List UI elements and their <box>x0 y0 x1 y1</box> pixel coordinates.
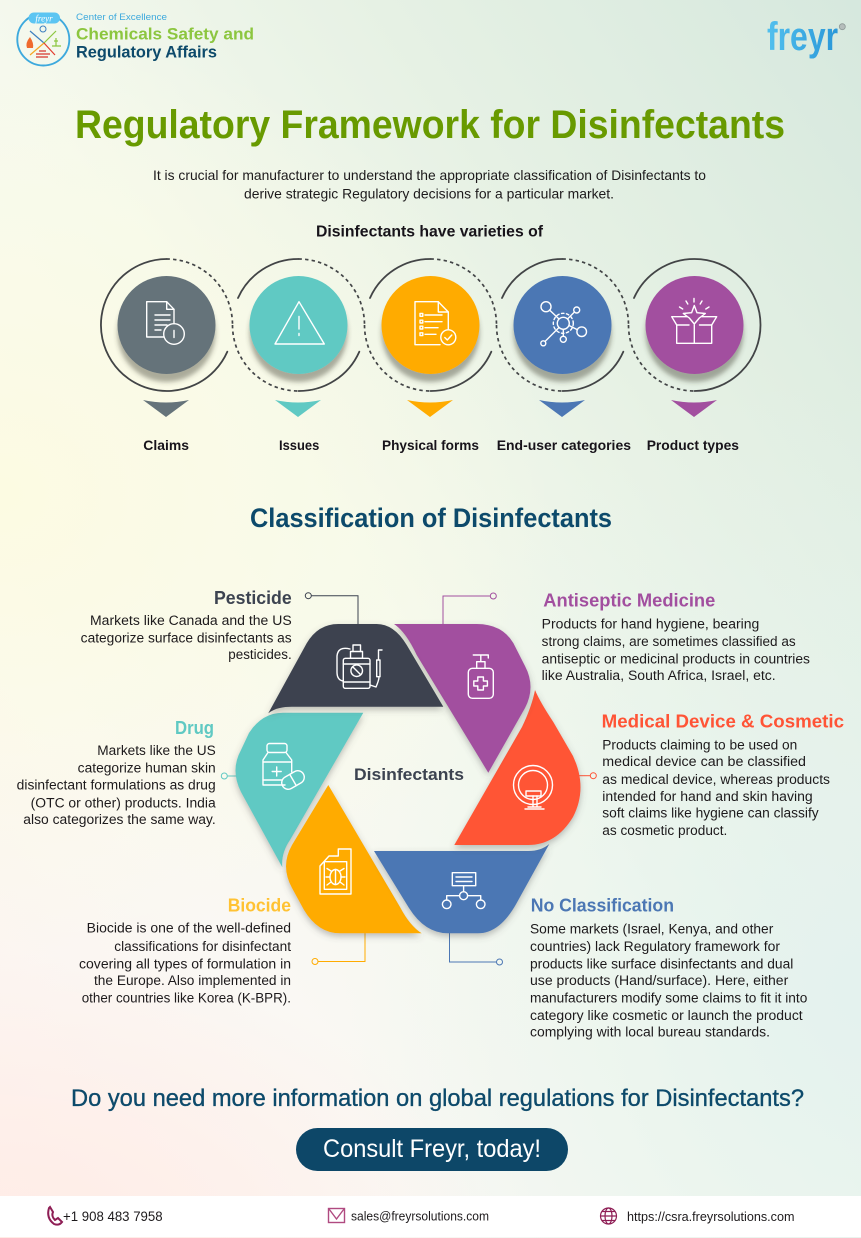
icon: scanner <box>514 766 552 809</box>
text: Antiseptic Medicine: Antiseptic Medicine <box>543 591 715 611</box>
call to action question: Do you need more information on global regulations for Disinfectants? <box>71 1085 804 1112</box>
variety: End-user categories <box>496 259 631 453</box>
connector: pesticide <box>305 593 358 626</box>
text: Antiseptic Medicine: like Australia, South Africa, Israel, etc. <box>542 668 776 683</box>
variety: Physical forms <box>364 259 496 453</box>
diagram: classification hexagon <box>221 593 596 965</box>
button: consult: Consult Freyr, today! <box>323 1135 541 1163</box>
icon: medicine bottle and pill <box>263 744 307 792</box>
segment: medical device <box>454 690 580 845</box>
text: Medical Device & Cosmetic: intended for hand and skin having <box>602 789 813 804</box>
text: Antiseptic Medicine <box>542 591 810 683</box>
logo: Chemicals Safety and Regulatory Affairs: freyr <box>35 14 53 24</box>
text: Medical Device & Cosmetic <box>602 712 844 838</box>
subheading: varieties: Disinfectants have varieties of <box>316 224 544 240</box>
icon: envelope <box>328 1208 344 1222</box>
heading: classification: Classification of Disinfectants <box>250 503 612 533</box>
icon: open box with star <box>672 298 717 343</box>
text: Drug: categorize human skin <box>78 760 216 775</box>
connector: no classification <box>450 932 502 965</box>
text: No Classification: products like surface disinfectants and dual <box>530 956 793 971</box>
connector: biocide <box>312 932 365 964</box>
logo: Chemicals Safety and Regulatory Affairs: Regulatory Affairs <box>76 42 217 62</box>
intro text <box>153 167 706 202</box>
text: Drug: Drug <box>175 718 214 738</box>
icon: document with alert <box>147 302 184 344</box>
text: No Classification: countries) lack Regulatory framework for <box>530 939 781 954</box>
icon: globe <box>600 1208 616 1224</box>
icon: sprayer <box>337 645 382 688</box>
icon: checklist document <box>415 302 456 345</box>
text: No Classification: Some markets (Israel, Kenya, and other <box>530 921 774 936</box>
segment: no classification <box>374 844 549 933</box>
intro text: derive strategic Regulatory decisions for a particular market. <box>244 186 614 202</box>
logo: Chemicals Safety and Regulatory Affairs <box>17 12 254 66</box>
text: Drug: Markets like the US <box>97 743 216 758</box>
text: No Classification: manufacturers modify some claims to fit it into <box>530 990 807 1005</box>
text: Pesticide: categorize surface disinfectants as <box>81 630 292 645</box>
intro text: It is crucial for manufacturer to understand the appropriate classification of Disinfectants to <box>153 167 706 183</box>
title: Regulatory Framework for Disinfectants <box>75 103 785 147</box>
contact: website: https://csra.freyrsolutions.com <box>627 1209 794 1224</box>
variety: Product types: Product types <box>647 437 739 453</box>
variety: Claims: Claims <box>143 437 189 453</box>
variety: Physical forms: Physical forms <box>382 437 479 453</box>
icon: phone <box>48 1207 62 1225</box>
text: Pesticide: Markets like Canada and the US <box>90 613 292 628</box>
segment: drug <box>236 713 363 867</box>
text: Medical Device & Cosmetic: medical device can be classified <box>602 754 806 769</box>
footer <box>0 1196 861 1237</box>
connector: drug <box>221 773 238 779</box>
text: Biocide: Biocide is one of the well-defined <box>87 921 291 936</box>
text: No Classification: No Classification <box>531 896 674 916</box>
variety: Product types <box>628 259 761 453</box>
contact: email: sales@freyrsolutions.com <box>351 1208 489 1224</box>
variety: Claims <box>101 259 233 453</box>
text: Drug: also categorizes the same way. <box>23 812 216 827</box>
connector: medical device <box>579 773 596 779</box>
text: No Classification <box>530 896 807 1040</box>
icon: network nodes <box>541 302 586 346</box>
text: Drug: disinfectant formulations as drug <box>17 778 216 793</box>
text: No Classification: category like cosmetic or launch the product <box>530 1008 803 1023</box>
text: No Classification: complying with local bureau standards. <box>530 1025 770 1040</box>
icon: sanitizer bottle <box>468 655 493 698</box>
text: Medical Device & Cosmetic: as medical device, whereas products <box>602 772 830 787</box>
text: Biocide: the Europe. Also implemented in <box>94 973 291 988</box>
text: Biocide <box>79 896 291 1006</box>
text: Medical Device & Cosmetic: soft claims like hygiene can classify <box>602 806 819 821</box>
text: Biocide: covering all types of formulation in <box>79 956 291 971</box>
variety: End-user categories: End-user categories <box>497 437 631 453</box>
icon: jerrycan with bug <box>320 849 351 894</box>
segment: antiseptic medicine <box>394 624 530 773</box>
button: consult <box>296 1128 568 1171</box>
variety: Issues: Issues <box>279 437 319 453</box>
text: Pesticide: pesticides. <box>228 647 292 662</box>
segment: pesticide <box>268 624 443 713</box>
text: Antiseptic Medicine: strong claims, are sometimes classified as <box>542 634 796 649</box>
contact: phone: +1 908 483 7958 <box>63 1209 163 1224</box>
text: Biocide: Biocide <box>228 896 291 916</box>
text: Drug: (OTC or other) products. India <box>31 795 216 810</box>
icon: warning triangle <box>275 302 324 344</box>
text: Drug <box>17 718 216 827</box>
text: Antiseptic Medicine: antiseptic or medicinal products in countries <box>542 651 810 666</box>
text: Pesticide <box>81 588 292 662</box>
segment: biocide <box>286 785 422 933</box>
text: Biocide: classifications for disinfectant <box>114 939 291 954</box>
label: disinfectants center: Disinfectants <box>354 765 464 784</box>
text: No Classification: use products (Hand/surface). Here, either <box>530 973 789 988</box>
text: Medical Device & Cosmetic: Medical Device & Cosmetic <box>602 712 844 732</box>
text: Biocide: other countries like Korea (K-BPR). <box>82 991 291 1006</box>
variety: Issues <box>232 259 364 453</box>
text: Medical Device & Cosmetic: as cosmetic product. <box>602 823 727 838</box>
text: Antiseptic Medicine: Products for hand hygiene, bearing <box>542 616 759 631</box>
logo: freyr: freyr <box>767 15 838 59</box>
icon: hierarchy chart <box>442 873 485 909</box>
text: Medical Device & Cosmetic: Products claiming to be used on <box>602 737 797 752</box>
text: Pesticide: Pesticide <box>214 588 292 608</box>
logo: Chemicals Safety and Regulatory Affairs: Center of Excellence <box>76 12 167 23</box>
logo: Chemicals Safety and Regulatory Affairs: Chemicals Safety and <box>76 24 254 44</box>
connector: antiseptic <box>443 593 496 626</box>
